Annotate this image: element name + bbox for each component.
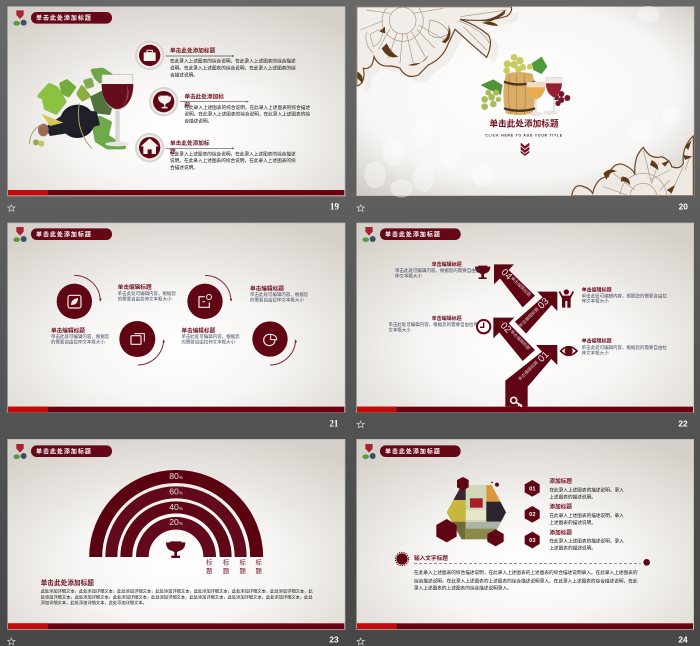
footer bar — [8, 407, 344, 412]
arrow 04: 04 — [499, 267, 514, 283]
item 1: 在此录入上述图表的综合说明，在此录入上述图表的综合描述 — [170, 58, 296, 65]
item 01: 上述图表的描述说明。 — [549, 493, 596, 500]
text block 02 — [388, 315, 479, 333]
ring labels: 题 — [223, 567, 230, 575]
step 3 circle with badge icon — [187, 275, 232, 319]
item 2: 题 — [184, 102, 190, 109]
illustration: wine and vine — [29, 70, 133, 148]
title: 单击此处添加标题 — [489, 118, 559, 129]
heading pill — [380, 228, 461, 240]
item 03: 上述图表的描述说明。 — [549, 545, 596, 552]
text block 04: 单击编辑标题 — [432, 261, 462, 268]
item 3: 题 — [170, 148, 176, 155]
item 02 — [525, 503, 624, 526]
text block 4 — [250, 284, 309, 303]
arrow 04 — [494, 264, 535, 307]
text body: 处添加详细文本，此处添加详细文本，此处添加详细文本，此处添加详细文本，此处添加详细文本，此处添加详细文本，此处添加详细文本，此处 — [41, 593, 313, 600]
text block 2: 单击编辑标题 — [51, 327, 85, 335]
icon: star — [8, 205, 15, 211]
item 02: 添加标题 — [549, 503, 572, 511]
item 02: 02 — [529, 512, 535, 518]
text block 3 — [181, 327, 240, 345]
arrow 01 with stem — [505, 345, 557, 407]
text block 3: 单击此处可编辑内容，根据您 — [181, 333, 240, 340]
text block 03: 单击编辑标题 — [582, 286, 612, 293]
lace ornament bottom right — [571, 134, 694, 196]
slide 24 background — [357, 439, 694, 629]
panel: slide 23 — [8, 439, 345, 645]
lower text body: 在此录入上述图表的综合描述说明，在此录入上述图表的上述图表的综合描述说明录入。在此录入上述图表的 — [414, 569, 638, 576]
item 2: 单击此处添加标 — [184, 92, 224, 100]
step 4 circle with pie icon — [252, 321, 297, 365]
text block 1: 的需要自由拉伸文本框大小 — [118, 296, 172, 303]
slide number: 19 — [330, 202, 339, 212]
slide 22 background — [357, 223, 694, 412]
logo — [13, 227, 27, 242]
item 01: 添加标题 — [549, 477, 572, 485]
arrow 01 with stem: 01 — [536, 349, 551, 365]
text block 03: 伸文本框大小 — [582, 298, 609, 305]
panel: slide 20 — [357, 0, 694, 220]
slide number: 23 — [329, 635, 339, 645]
icon: star — [357, 638, 364, 645]
item 1: 说明。在此录入上述图表的综合说明，在此录入上述图表的综 — [170, 64, 296, 71]
logo — [13, 444, 27, 459]
subtitle: CLICK HERE TO ADD YOUR TITLE — [485, 133, 563, 137]
footer bar — [357, 623, 693, 629]
panel: slide 21 — [8, 223, 345, 428]
heading pill — [31, 228, 112, 240]
dashed connector — [414, 559, 650, 566]
text block 03 — [582, 286, 667, 305]
logo — [362, 227, 376, 242]
arrow 03 — [515, 292, 557, 334]
arrow 02: 单击编辑标题 — [509, 328, 532, 352]
item 01: 在此录入上述图表的描述说明，录入 — [549, 486, 624, 493]
lower heading: 输入文字标题 — [414, 554, 448, 562]
logo — [13, 10, 27, 26]
item 02: 在此录入上述图表的描述说明，录入 — [549, 512, 624, 519]
ring labels: 标 — [223, 557, 230, 566]
text block 04: 伸文本框大小 — [395, 272, 422, 279]
heading pill — [380, 445, 461, 457]
arrow 01 with stem: 单击编辑标题 — [516, 359, 540, 382]
icon: star — [8, 638, 15, 645]
slide number: 24 — [678, 635, 688, 645]
text block 4: 的需要自由拉伸文本框大小 — [250, 296, 304, 303]
text body — [41, 587, 313, 606]
text block 01 — [582, 338, 667, 356]
slide 19 background — [8, 7, 345, 196]
icon: eye — [561, 347, 577, 355]
icon: trophy — [475, 266, 490, 279]
footer bar — [8, 623, 344, 629]
text block 04: 单击此处可编辑内容，根据您的需要自由拉 — [395, 267, 481, 274]
icon: key — [511, 397, 522, 407]
text block 01: 单击此处可编辑内容，根据您的需要自由拉 — [582, 344, 667, 351]
heading pill: 单击此处添加标题 — [385, 230, 441, 238]
text block 3: 单击编辑标题 — [181, 327, 216, 335]
ring labels: 标 — [240, 557, 247, 566]
icon: clock — [477, 320, 490, 333]
slide number: 20 — [679, 202, 688, 212]
text block 01: 伸文本框大小 — [582, 349, 609, 356]
text body: 添加详细文本，此处添加详细文本，此处添加详细文本。 — [41, 599, 147, 606]
text block 2: 单击此处可编辑内容，根据您 — [51, 333, 110, 340]
item 01: 01 — [529, 486, 535, 492]
step 2 circle with wallet icon — [119, 321, 165, 365]
lower text body: 综合描述说明，在此录入上述图表的上述图表的综合描述说明录入。在此录入上述图表的综合描述说明，在此 — [414, 577, 638, 584]
heading pill: 单击此处添加标题 — [36, 14, 92, 22]
text heading: 单击此处添加标题 — [41, 578, 94, 587]
chart: semicircle rings — [96, 471, 257, 557]
chart: semicircle rings: 20% — [169, 517, 183, 527]
heading pill — [31, 445, 112, 457]
ring labels: 题 — [256, 567, 263, 575]
text block 4: 单击编辑标题 — [250, 284, 284, 292]
ring labels: 标 — [206, 557, 213, 566]
lower text body: 录入上述图表的上述图表的综合描述说明录入。 — [414, 585, 512, 592]
ring labels: 标 — [256, 557, 263, 566]
item 3: 说明。在此录入上述图表的综合说明，在此录入上述图表的综 — [170, 157, 296, 164]
lace ornament top left — [357, 0, 520, 92]
text body: 此处添加详细文本，此处添加详细文本，此处添加详细文本，此处添加详细文本，此处添加详细文本，此处添加详细文本，此处添加详细文本，此 — [41, 587, 313, 594]
text block 02: 单击此处可编辑内容，根据您的需要自由拉伸 — [388, 321, 479, 328]
text block 1: 单击此处可编辑内容，根据您 — [118, 290, 176, 297]
item 1 — [135, 41, 296, 78]
text block 03: 单击此处可编辑内容，根据您的需要自由拉 — [582, 292, 667, 299]
lower text body — [414, 569, 638, 592]
illustration: wine barrel — [481, 54, 570, 116]
slide 20 background — [357, 7, 694, 196]
item 2: 在此录入上述图表的综合说明，在此录入上述图表的综合描述 — [184, 104, 310, 111]
icon: person — [559, 289, 574, 308]
item 02: 上述图表的描述说明。 — [549, 519, 596, 526]
item 1: 合描述说明。 — [170, 71, 198, 78]
icon: briefcase — [135, 41, 164, 70]
text block 04 — [395, 261, 481, 279]
slide number: 22 — [678, 418, 688, 428]
item 2 — [149, 87, 310, 124]
text block 2: 的需要自由拉伸文本框大小 — [51, 338, 105, 345]
hexagon photo mosaic — [436, 477, 508, 546]
icon: star — [357, 421, 364, 428]
slide 23 background — [8, 439, 345, 629]
icon: chevrons — [521, 143, 529, 156]
text block 02: 单击编辑标题 — [432, 315, 462, 322]
icon: burst badge — [395, 552, 409, 566]
item 1: 单击此处添加标题 — [170, 47, 216, 55]
heading pill: 单击此处添加标题 — [36, 447, 92, 455]
arrow 03: 单击编辑标题 — [517, 305, 541, 329]
item 03: 添加标题 — [549, 528, 572, 536]
item 2: 说明。在此录入上述图表的综合说明，在此录入上述图表的综 — [184, 110, 310, 117]
text block 1 — [118, 283, 176, 303]
arrow 02: 02 — [498, 320, 513, 336]
footer bar — [357, 407, 693, 412]
footer bar — [8, 190, 344, 195]
slide number: 21 — [329, 418, 339, 428]
item 03: 在此录入上述图表的描述说明，录入 — [549, 538, 624, 545]
item 3: 合描述说明。 — [170, 164, 198, 171]
item 01 — [525, 477, 624, 500]
icon: star — [357, 205, 364, 211]
ring labels: 题 — [206, 567, 213, 575]
text block 2 — [51, 327, 110, 345]
arrow 03: 03 — [536, 296, 551, 311]
panel: slide 24 — [357, 439, 694, 645]
heading pill: 单击此处添加标题 — [385, 447, 441, 455]
step 1 circle with leaf icon — [57, 275, 102, 319]
arrow 04: 单击编辑标题 — [509, 275, 533, 299]
icon: trophy — [166, 541, 185, 558]
icon: house — [135, 133, 164, 162]
ring labels — [206, 557, 263, 575]
item 03: 03 — [529, 538, 535, 544]
text block 3: 的需要自由拉伸文本框大小 — [181, 338, 236, 345]
text block 01: 单击编辑标题 — [582, 338, 612, 345]
arrow 02 — [493, 318, 535, 361]
item 3: 在此录入上述图表的综合说明，在此录入上述图表的综合描述 — [170, 151, 296, 158]
text block 1: 单击编辑标题 — [118, 283, 152, 291]
chart: semicircle rings: 40% — [169, 502, 183, 512]
item 03 — [525, 528, 624, 552]
text block 4: 单击此处可编辑内容，根据您 — [250, 291, 309, 298]
chart: semicircle rings: 60% — [169, 486, 183, 496]
item 2: 合描述说明。 — [184, 117, 212, 124]
slide 21 background — [8, 223, 345, 412]
logo — [362, 444, 376, 459]
icon: trophy — [149, 87, 178, 116]
panel: slide 22 — [357, 223, 694, 428]
item 3 — [135, 133, 296, 171]
chart: semicircle rings: 80% — [169, 471, 183, 481]
bokeh lights — [364, 6, 681, 198]
text block 02: 文本框大小 — [388, 326, 411, 333]
heading pill: 单击此处添加标题 — [36, 230, 92, 238]
item 3: 单击此处添加标 — [170, 139, 210, 147]
ring labels: 题 — [240, 567, 247, 575]
panel: slide 19 — [8, 7, 345, 212]
heading pill — [31, 12, 112, 24]
